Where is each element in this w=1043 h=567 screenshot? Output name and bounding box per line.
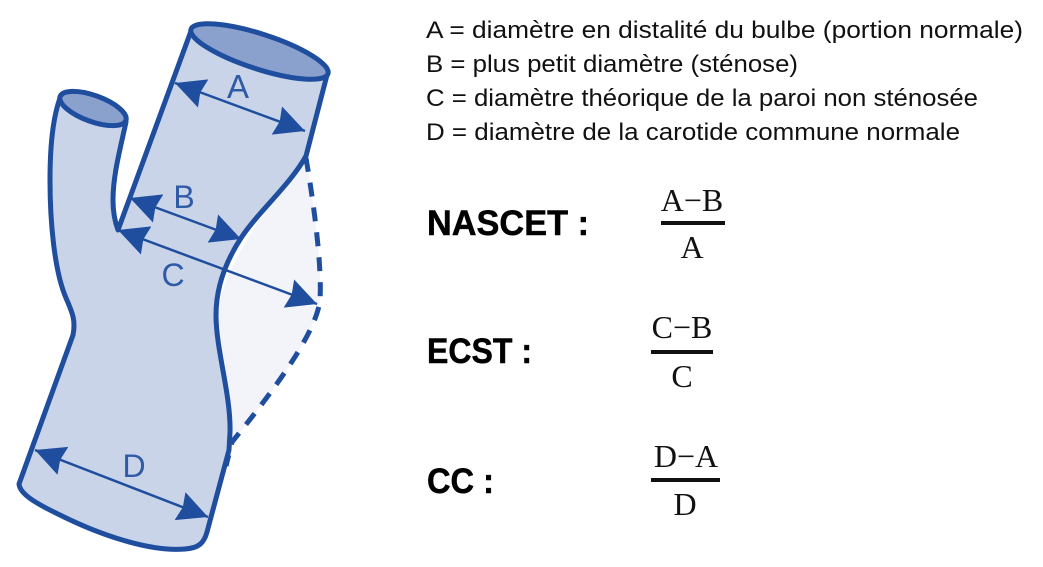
ECST heading: ECST : <box>427 332 532 371</box>
arrow D <box>35 450 208 517</box>
external carotid opening <box>56 84 130 133</box>
label C: C <box>161 257 185 293</box>
dashed theoretical wall <box>226 158 320 466</box>
legend definitions <box>426 17 1023 146</box>
normal wall region (stenosis area) <box>217 156 320 445</box>
ECST formula <box>651 309 713 394</box>
definition B: B = plus petit diamètre (sténose) <box>426 51 798 78</box>
arrow B <box>130 198 241 239</box>
arrow C <box>118 230 317 304</box>
arrow A <box>175 83 305 131</box>
NASCET formula <box>661 182 725 265</box>
label A: A <box>227 68 249 105</box>
CC formula: D−A <box>654 438 718 474</box>
carotid diagram <box>19 13 333 549</box>
internal carotid opening <box>186 13 333 90</box>
label B: B <box>173 179 195 215</box>
CC heading: CC : <box>427 462 494 501</box>
NASCET formula: A <box>680 229 704 265</box>
label D: D <box>122 448 146 484</box>
NASCET heading: NASCET : <box>427 204 589 243</box>
vessel body <box>19 31 327 549</box>
CC formula: D <box>673 486 697 522</box>
CC formula <box>651 438 720 522</box>
NASCET formula: A−B <box>661 182 723 218</box>
ECST formula: C <box>671 358 693 394</box>
ECST formula: C−B <box>652 309 712 345</box>
definition D: D = diamètre de la carotide commune normale <box>426 119 960 146</box>
definition C: C = diamètre théorique de la paroi non sténosée <box>426 85 978 112</box>
definition A: A = diamètre en distalité du bulbe (portion normale) <box>426 17 1023 44</box>
